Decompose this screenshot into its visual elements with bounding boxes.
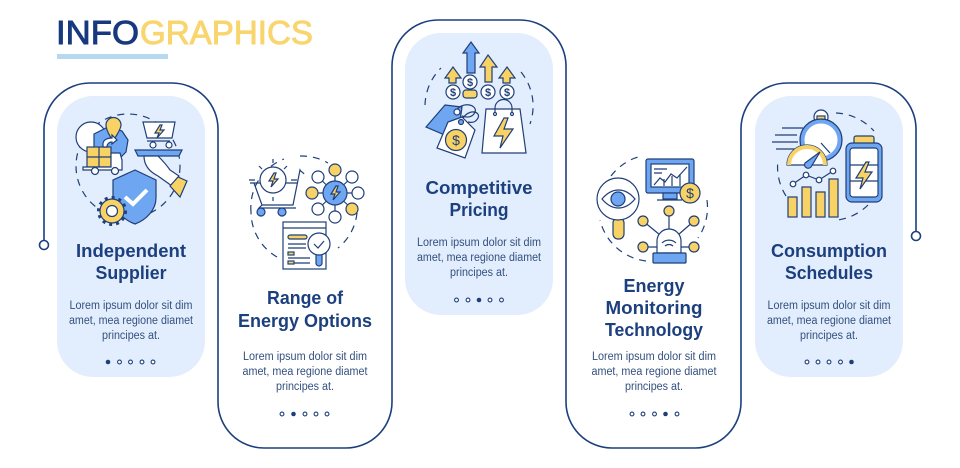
- body text: Lorem ipsum dolor sit dim: [243, 351, 367, 363]
- icon: schedules: [772, 110, 882, 220]
- icon: pricing: $: [452, 132, 460, 148]
- title: INFO: [56, 14, 139, 51]
- body text: Lorem ipsum dolor sit dim: [768, 300, 890, 312]
- heading: Pricing: [450, 199, 508, 220]
- heading: Consumption: [771, 240, 887, 261]
- pagination dots: [455, 298, 503, 302]
- icon: energy options: [249, 156, 364, 269]
- heading: Energy: [624, 275, 685, 296]
- body text: amet, mea regione diamet: [417, 252, 542, 264]
- heading: Supplier: [96, 262, 166, 283]
- body text: principes at.: [625, 381, 683, 393]
- body text: principes at.: [102, 330, 160, 342]
- body text: [242, 351, 368, 393]
- heading: [605, 275, 704, 340]
- body text: principes at.: [450, 267, 508, 279]
- body text: amet, mea regione diamet: [767, 315, 892, 327]
- body text: principes at.: [800, 330, 858, 342]
- title: [56, 14, 313, 59]
- heading: Competitive: [426, 177, 532, 198]
- icon: pricing: $: [450, 87, 456, 99]
- icon: pricing: $: [504, 87, 510, 99]
- body text: Lorem ipsum dolor sit dim: [70, 300, 192, 312]
- icon: monitoring: [597, 157, 708, 263]
- body text: Lorem ipsum dolor sit dim: [417, 237, 541, 249]
- body text: [417, 237, 542, 279]
- pagination dots: [280, 412, 329, 416]
- body text: amet, mea regione diamet: [242, 366, 368, 378]
- body text: [592, 351, 717, 393]
- icon: pricing: $: [467, 77, 473, 89]
- pagination dots: [106, 360, 155, 364]
- heading: [426, 177, 532, 220]
- heading: [238, 287, 372, 331]
- body text: amet, mea regione diamet: [592, 366, 717, 378]
- pagination dots: [630, 412, 679, 416]
- panel: consumption schedules: [755, 96, 903, 377]
- body text: [69, 300, 194, 342]
- body text: principes at.: [276, 381, 334, 393]
- body text: Lorem ipsum dolor sit dim: [592, 351, 716, 363]
- icon: supplier: [76, 114, 187, 224]
- heading: Technology: [605, 319, 704, 340]
- panel: competitive pricing: [405, 33, 553, 315]
- icon: pricing: $: [485, 87, 491, 99]
- body text: amet, mea regione diamet: [69, 315, 194, 327]
- heading: [76, 240, 186, 283]
- panel: independent supplier: [57, 96, 205, 377]
- panel: energy monitoring technology: [592, 157, 717, 416]
- panel: range of energy options: [238, 156, 372, 416]
- heading: Monitoring: [606, 297, 702, 318]
- title: GRAPHICS: [140, 14, 313, 51]
- heading: Range of: [267, 287, 344, 308]
- heading: [771, 240, 887, 283]
- heading: Independent: [76, 240, 186, 261]
- icon: monitoring: $: [686, 185, 694, 201]
- body text: [767, 300, 892, 342]
- heading: Schedules: [785, 262, 873, 283]
- heading: Energy Options: [238, 310, 372, 331]
- pagination dots: [805, 360, 854, 364]
- icon: pricing: [425, 42, 533, 158]
